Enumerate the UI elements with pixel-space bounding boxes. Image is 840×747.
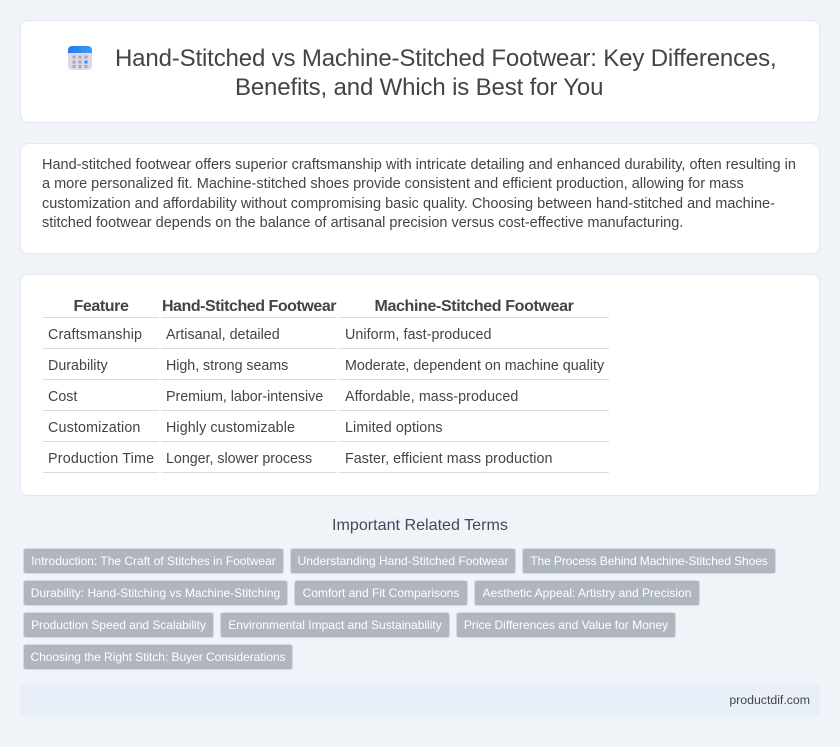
- table row: craftsmanship: Artisanal, detailed: [166, 327, 280, 343]
- table header: Feature: [74, 298, 128, 315]
- table header: Machine-Stitched Footwear: [374, 298, 574, 315]
- table row: production time: [43, 451, 609, 473]
- tag: [290, 548, 516, 574]
- tag: [294, 580, 468, 606]
- panel: title header: [20, 20, 820, 123]
- table row: durability: Durability: [48, 358, 108, 374]
- table row: customization: Limited options: [345, 420, 443, 436]
- heading: important related terms: Important Related Terms: [332, 516, 508, 534]
- tag: [220, 612, 450, 638]
- panel: summary paragraph: [20, 143, 820, 254]
- table row: customization: [43, 420, 609, 442]
- table header: [43, 298, 609, 318]
- tag: Comfort and Fit Comparisons: [303, 586, 459, 600]
- table row: production time: Longer, slower process: [166, 451, 312, 467]
- tag: [474, 580, 700, 606]
- table row: cost: Cost: [48, 389, 77, 405]
- tag: Production Speed and Scalability: [31, 618, 206, 632]
- table row: customization: Highly customizable: [166, 420, 295, 436]
- table row: production time: Faster, efficient mass production: [345, 451, 553, 467]
- text block: summary: [42, 157, 796, 231]
- table row: craftsmanship: Craftsmanship: [48, 327, 142, 343]
- tag: Choosing the Right Stitch: Buyer Considerations: [31, 650, 285, 664]
- table row: durability: [43, 358, 609, 380]
- tag: [23, 548, 284, 574]
- tag: Price Differences and Value for Money: [464, 618, 668, 632]
- tag: [456, 612, 676, 638]
- tag: Aesthetic Appeal: Artistry and Precision: [483, 586, 691, 600]
- text block: summary: customization and affordability without compromising basic quality. Choosing between hand-stitched and machine-: [42, 196, 775, 212]
- table row: durability: Moderate, dependent on machine quality: [345, 358, 604, 374]
- icon: calendar: [68, 46, 92, 70]
- text block: summary: a more personalized fit. Machine-stitched shoes provide consistent and efficient production, allowing for mass: [42, 176, 744, 192]
- title: [115, 45, 777, 101]
- tag: Understanding Hand-Stitched Footwear: [298, 554, 508, 568]
- table row: cost: Affordable, mass-produced: [345, 389, 518, 405]
- text block: summary: Hand-stitched footwear offers superior craftsmanship with intricate detailing and enhanced durability, often resulting in: [42, 157, 796, 173]
- tag: Environmental Impact and Sustainability: [228, 618, 442, 632]
- table row: cost: Premium, labor-intensive: [166, 389, 323, 405]
- table row: production time: Production Time: [48, 451, 154, 467]
- footer bar: [20, 683, 820, 717]
- tag: [23, 580, 288, 606]
- table row: cost: [43, 389, 609, 411]
- footer source text: productdif.com: [729, 693, 810, 707]
- text block: summary: stitched footwear depends on the balance of artisanal precision versus cost-effective manufacturing.: [42, 215, 683, 231]
- table row: customization: Customization: [48, 420, 141, 436]
- tag: Introduction: The Craft of Stitches in Footwear: [31, 554, 276, 568]
- panel: related term tags: [23, 548, 776, 670]
- tag: [23, 612, 214, 638]
- tag: The Process Behind Machine-Stitched Shoes: [530, 554, 768, 568]
- tag: Durability: Hand-Stitching vs Machine-Stitching: [31, 586, 280, 600]
- tag: [522, 548, 776, 574]
- table row: durability: High, strong seams: [166, 358, 288, 374]
- panel: comparison table: [20, 274, 820, 496]
- table row: craftsmanship: [43, 327, 609, 349]
- title: Benefits, and Which is Best for You: [235, 74, 603, 101]
- table row: craftsmanship: Uniform, fast-produced: [345, 327, 492, 343]
- tag: [23, 644, 293, 670]
- title: Hand-Stitched vs Machine-Stitched Footwear: Key Differences,: [115, 45, 777, 72]
- table header: Hand-Stitched Footwear: [162, 298, 336, 315]
